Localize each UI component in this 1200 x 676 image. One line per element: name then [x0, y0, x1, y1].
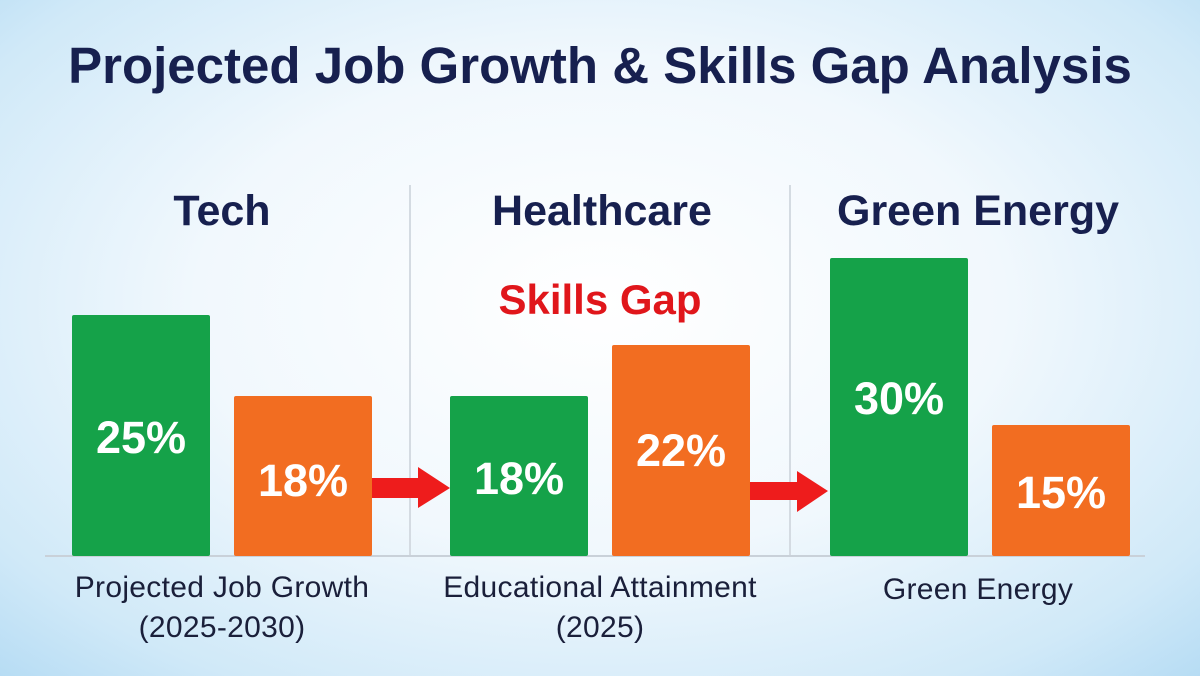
label: educational attainment — [443, 571, 757, 644]
heading: Green Energy: Green Energy — [837, 187, 1119, 235]
label: projected job growth: (2025-2030) — [139, 611, 305, 644]
bar: tech 18% — [234, 396, 372, 556]
bar: green energy 15% — [992, 425, 1130, 556]
label: green energy: Green Energy — [883, 573, 1073, 606]
panel: healthcare bars — [450, 345, 750, 556]
heading: Tech: Tech — [173, 187, 271, 235]
bar: healthcare 18% — [450, 396, 588, 556]
label: projected job growth: Projected Job Growth — [75, 571, 369, 604]
bar: green energy 30%: 30% — [854, 373, 944, 424]
bar: healthcare 22%: 22% — [636, 425, 726, 476]
heading: Healthcare: Healthcare — [492, 187, 712, 235]
skills gap label: Skills Gap — [498, 276, 702, 323]
bar: green energy 15%: 15% — [1016, 467, 1106, 518]
arrow 2 — [750, 471, 828, 512]
label: projected job growth — [75, 571, 369, 644]
panel: green energy bars — [830, 258, 1130, 556]
label: educational attainment: (2025) — [556, 611, 644, 644]
panel: tech bars — [72, 315, 372, 556]
bar: healthcare 22% — [612, 345, 750, 556]
bar: green energy 30% — [830, 258, 968, 556]
label: educational attainment: Educational Attainment — [443, 571, 757, 604]
title: Projected Job Growth & Skills Gap Analysis — [68, 37, 1132, 94]
arrow 1 — [372, 467, 450, 508]
bar: healthcare 18%: 18% — [474, 453, 564, 504]
bar: tech 25% — [72, 315, 210, 556]
bar: tech 25%: 25% — [96, 412, 186, 463]
bar: tech 18%: 18% — [258, 455, 348, 506]
